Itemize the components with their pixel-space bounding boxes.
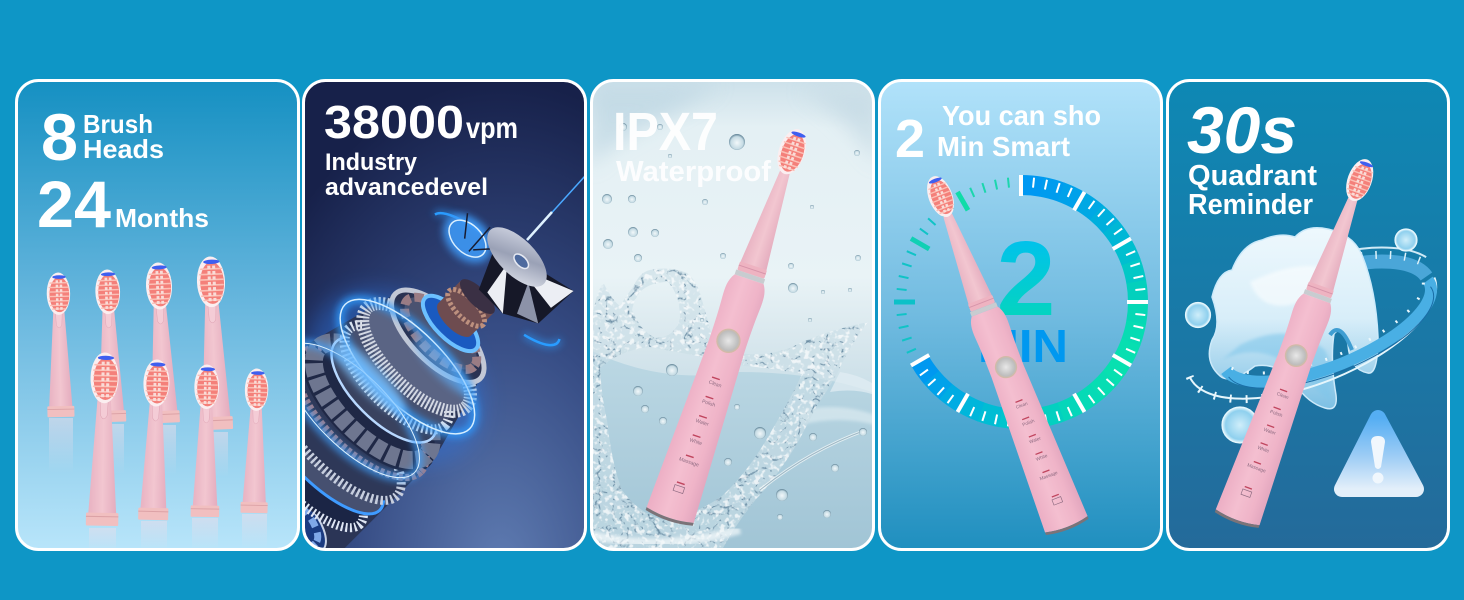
illustration: orbit ring back	[1233, 219, 1433, 346]
pink toothbrush: Massage	[678, 456, 700, 469]
pink toothbrush: Clean	[1015, 401, 1029, 410]
water droplets	[602, 123, 867, 520]
brush head reflections	[49, 418, 267, 552]
gear ring with tiles	[305, 340, 434, 472]
heading: 8 brush heads 24 months: Months	[115, 203, 209, 233]
heading: 8 brush heads 24 months: Heads	[83, 134, 164, 164]
gauge label: 2 MIN: 2	[997, 220, 1055, 338]
panel: 8 brush heads	[16, 80, 298, 552]
turbine fan	[479, 254, 574, 324]
heading: 8 brush heads 24 months: 8	[41, 100, 78, 174]
heading: 38000 vpm industry advancedevel: vpm	[466, 112, 518, 145]
replacement brush heads, back row	[44, 256, 233, 430]
pink toothbrush: Polish	[1269, 409, 1284, 419]
pink toothbrush	[912, 168, 1090, 538]
pink toothbrush: Water	[695, 418, 710, 428]
heading: 38000 vpm industry advancedevel	[324, 96, 518, 201]
pink toothbrush	[645, 122, 823, 529]
heading: you can sho 2 min smart: Min Smart	[937, 131, 1070, 162]
pink toothbrush: Polish	[1022, 418, 1036, 427]
pink toothbrush: White	[1035, 453, 1048, 462]
heading: 38000 vpm industry advancedevel: Industry	[325, 149, 418, 176]
pink toothbrush	[1214, 152, 1389, 531]
pink toothbrush: Clean	[1276, 391, 1290, 401]
illustration: glowing motor	[305, 176, 584, 548]
glowing energy rings	[332, 290, 483, 442]
pink toothbrush: Massage	[1039, 470, 1059, 481]
illustration: glass tooth	[1209, 228, 1378, 409]
heading: you can sho 2 min smart: 2	[895, 109, 925, 169]
pink toothbrush: Massage	[1246, 462, 1267, 475]
illustration: bubbles	[1186, 229, 1417, 443]
chart: two-minute circular gauge	[856, 137, 1186, 467]
blue spark cage behind fan	[438, 209, 492, 268]
gauge label: 2 MIN	[978, 220, 1068, 372]
panel: 38000 vpm motor	[302, 79, 587, 551]
panel: 2 min smart timer	[856, 80, 1186, 550]
heading: 8 brush heads 24 months: Brush	[83, 109, 153, 139]
heading: you can sho 2 min smart: You can sho	[942, 100, 1101, 131]
illustration: water splash	[590, 85, 880, 555]
pink toothbrush: Polish	[701, 399, 716, 409]
motor silhouette	[318, 296, 478, 548]
copper neck	[437, 280, 494, 337]
heading: 38000 vpm industry advancedevel: 38000	[324, 96, 464, 148]
heading: 8 brush heads 24 months	[37, 100, 209, 241]
heading: IPX7 waterproof	[613, 102, 771, 188]
panel: IPX7 waterproof	[590, 80, 880, 555]
icon: warning triangle	[1342, 418, 1416, 489]
panel: 30s quadrant reminder	[1168, 80, 1455, 550]
illustration: orbit ring front	[1190, 278, 1455, 428]
heading: 30s quadrant reminder: 30s	[1187, 93, 1297, 167]
heading: 8 brush heads 24 months: 24	[37, 167, 111, 241]
heading: 30s quadrant reminder: Reminder	[1188, 189, 1313, 221]
pink toothbrush: Clean	[708, 380, 722, 389]
heading: 38000 vpm industry advancedevel: advancedevel	[325, 174, 488, 201]
bottom fan and shaft	[305, 508, 327, 548]
middle finned section	[340, 320, 454, 434]
gauge label: 2 MIN: MIN	[978, 320, 1068, 372]
pink toothbrush: Water	[1263, 427, 1277, 437]
heading: IPX7 waterproof: IPX7	[613, 102, 718, 162]
pink toothbrush: Water	[1028, 435, 1042, 445]
heading: 30s quadrant reminder	[1187, 93, 1317, 221]
pink toothbrush: White	[689, 437, 703, 447]
heading: you can sho 2 min smart	[895, 100, 1101, 169]
replacement brush heads, front row	[86, 352, 271, 526]
heading: IPX7 waterproof: Waterproof	[616, 156, 771, 188]
heading: 30s quadrant reminder: Quadrant	[1188, 160, 1317, 192]
lower finned section	[305, 480, 368, 532]
pink toothbrush: White	[1256, 445, 1270, 455]
